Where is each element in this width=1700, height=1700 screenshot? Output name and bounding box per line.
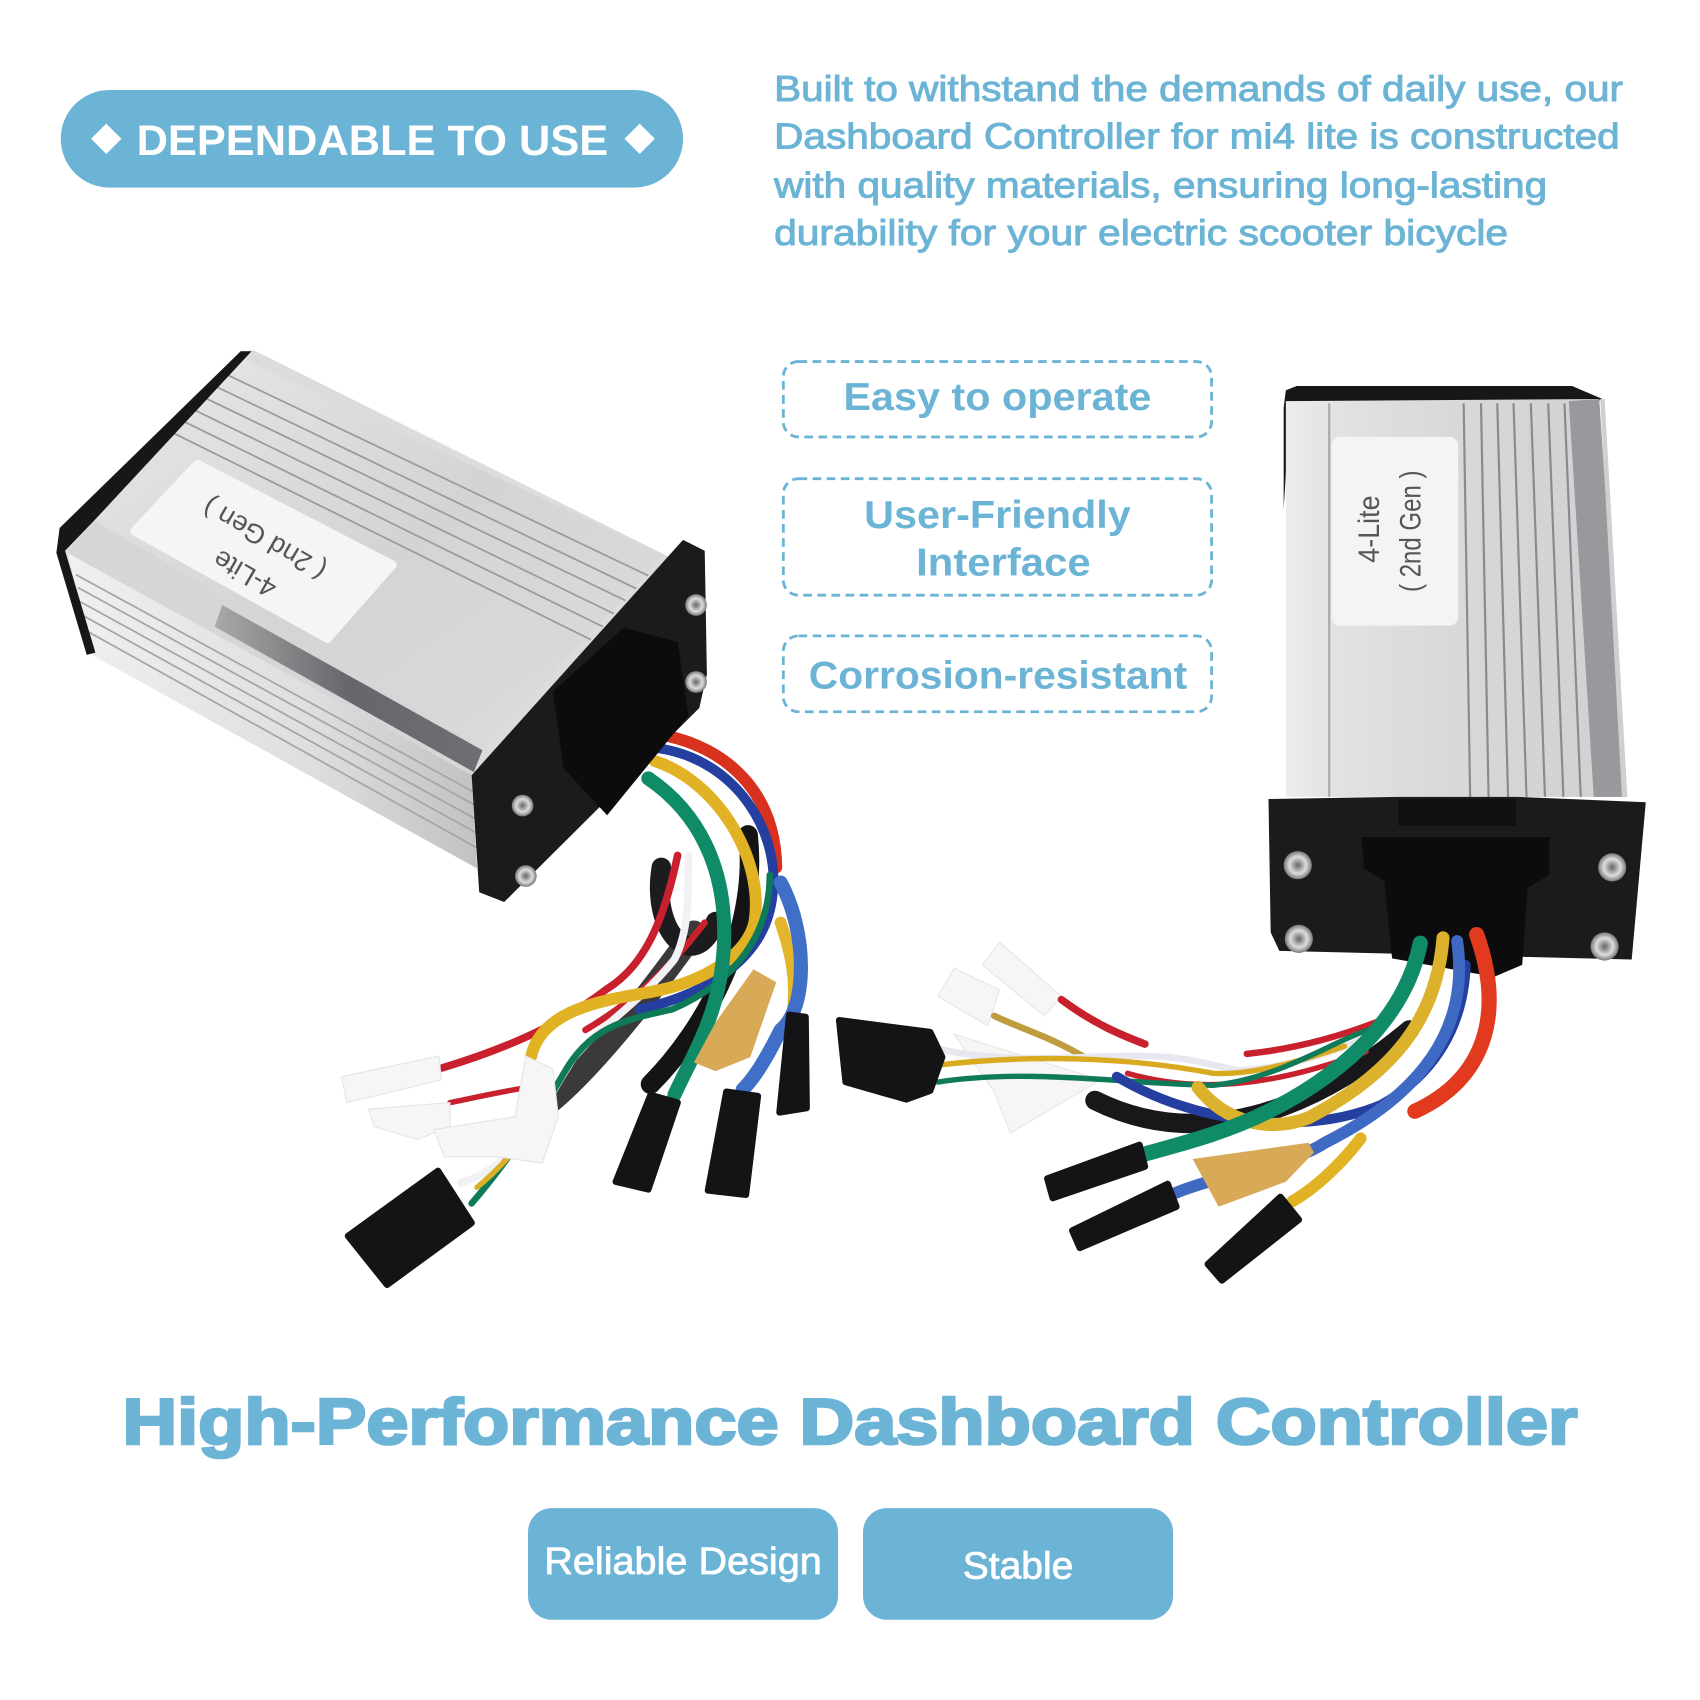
description text block [773, 68, 1623, 253]
description text block: with quality materials, ensuring long-lasting [773, 164, 1547, 205]
feature tag: easy to operate [783, 362, 1212, 437]
right controller black plugs [839, 1020, 1299, 1280]
right controller wires [932, 935, 1489, 1201]
feature tag: user-friendly interface: Interface [916, 542, 1091, 585]
left controller label [134, 464, 392, 639]
feature tag: corrosion-resistant: Corrosion-resistant [809, 654, 1187, 697]
left controller label: ( 2nd Gen ) [197, 492, 331, 587]
description text block: Dashboard Controller for mi4 lite is constructed [774, 116, 1620, 157]
feature tag: corrosion-resistant [783, 636, 1212, 712]
feature tag: easy to operate: Easy to operate [843, 376, 1151, 419]
badge: dependable to use: DEPENDABLE TO USE [137, 117, 608, 164]
right controller front plate [1268, 797, 1646, 977]
right controller gold connector [1193, 1143, 1314, 1207]
product photo: left controller [56, 350, 807, 1285]
feature tag: user-friendly interface: User-Friendly [864, 494, 1131, 537]
right controller white connectors [938, 942, 1100, 1133]
left controller label: 4-Lite [208, 544, 282, 605]
left controller wires [442, 735, 801, 1203]
title: High-Performance Dashboard Controller [123, 1385, 1577, 1458]
button: reliable design [528, 1508, 838, 1620]
left controller front plate [472, 540, 707, 902]
left controller gold connector [694, 969, 776, 1071]
left controller body [56, 350, 672, 868]
button: stable [863, 1508, 1173, 1620]
right controller body [1284, 386, 1627, 797]
product photo: right controller [839, 386, 1646, 1280]
right controller label: 4-Lite [1354, 495, 1386, 563]
badge: dependable to use [61, 90, 683, 188]
left controller white connectors [342, 1056, 558, 1163]
feature tag: user-friendly interface [783, 479, 1212, 595]
right controller label: ( 2nd Gen ) [1395, 471, 1427, 592]
button: stable: Stable [963, 1546, 1073, 1588]
left controller black plugs [348, 1015, 807, 1285]
right controller label [1331, 437, 1458, 626]
button: reliable design: Reliable Design [544, 1541, 822, 1583]
description text block: Built to withstand the demands of daily use, our [774, 68, 1623, 109]
description text block: durability for your electric scooter bicycle [774, 212, 1508, 253]
